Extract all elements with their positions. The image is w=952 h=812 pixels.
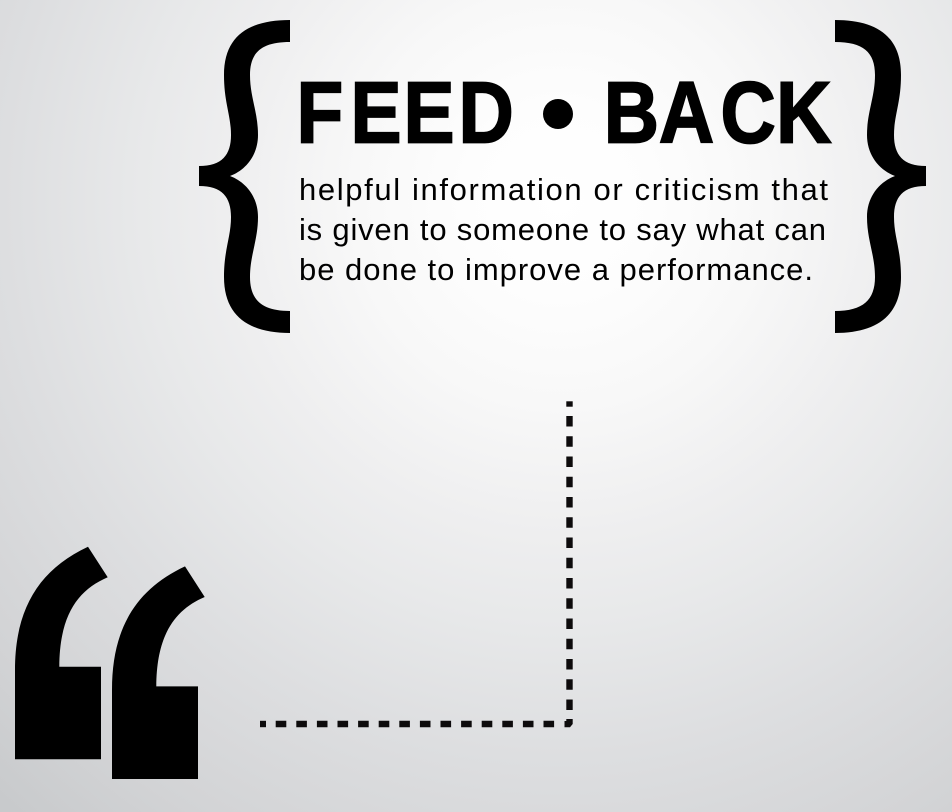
definition text: helpful information or criticism that (299, 172, 828, 207)
icon: opening quotation mark (15, 547, 205, 779)
icon: left curly brace (199, 20, 290, 333)
definition text: is given to someone to say what can (299, 212, 826, 247)
definition text: be done to improve a performance. (299, 252, 813, 287)
title: BACK (604, 65, 831, 162)
title: FEED (296, 65, 514, 162)
arrow: dashed connector line (260, 401, 573, 727)
icon: right curly brace (835, 20, 926, 333)
icon: left quote stroke (15, 547, 108, 759)
title (296, 65, 831, 162)
definition text (299, 172, 828, 287)
icon: right quote stroke (112, 566, 205, 779)
